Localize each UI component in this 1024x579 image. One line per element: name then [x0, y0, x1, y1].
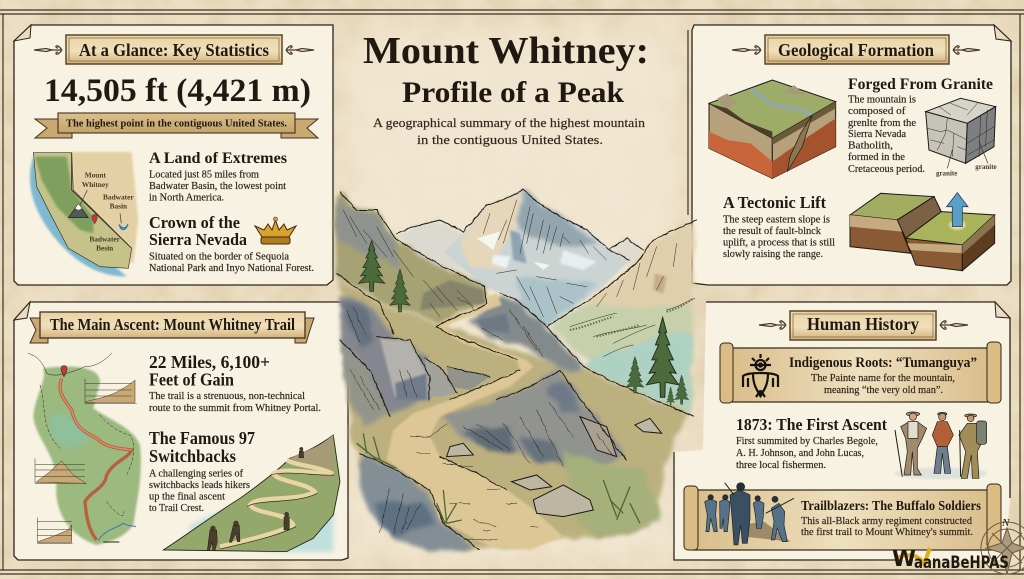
- scroll: buffalo soldiers: Trailblazers: The Buffalo Soldiers: [801, 498, 981, 513]
- heading banner: The Main Ascent: Mount Whitney Trail: [50, 315, 295, 334]
- illustration: three explorers: [894, 412, 987, 479]
- section: crown of the sierra nevada: National Park and Inyo National Forest.: [149, 263, 314, 274]
- map of California: Badwater: [103, 193, 134, 202]
- illustration: soldiers: [705, 483, 794, 545]
- compass rose: N: [1001, 517, 1010, 529]
- ribbon: The highest point in the contiguous United States.: [66, 118, 287, 130]
- foreground rock: [362, 455, 477, 552]
- subtitle: [373, 115, 646, 147]
- map of California: Besin: [96, 243, 113, 252]
- scroll: indigenous roots: [720, 342, 1001, 403]
- middle slope: [340, 277, 690, 550]
- section: 22 miles: Feet of Gain: [149, 370, 234, 390]
- title: Mount Whitney:: [363, 30, 649, 72]
- section: a tectonic lift: [723, 193, 835, 260]
- scroll: buffalo soldiers: This all-Black army regiment constructed: [801, 516, 973, 527]
- elevation chart 3: [37, 518, 73, 543]
- section: forged from granite: [848, 76, 993, 175]
- section: forged from granite: Cretaceous period.: [848, 164, 925, 175]
- section: 22 miles: 22 Miles, 6,100+: [149, 352, 270, 372]
- scroll: indigenous roots: Indigenous Roots: “Tumanguya”: [789, 355, 977, 371]
- section: the famous 97 switchbacks: up the final ascent: [149, 492, 225, 502]
- map of California: Badwater: [89, 234, 121, 243]
- compass rose: [981, 517, 1024, 574]
- panel: human history: [674, 302, 1010, 560]
- corner fold: [994, 25, 1011, 41]
- panel: geological formation: [688, 25, 1011, 285]
- panel background: [674, 302, 1010, 560]
- subtitle: A geographical summary of the highest mountain: [373, 115, 646, 130]
- heading banner: [30, 312, 314, 343]
- central ridge: [470, 297, 583, 370]
- elevation chart 1: [85, 378, 137, 403]
- icon: granite cube: granite: [936, 170, 957, 178]
- section: the famous 97 switchbacks: Switchbacks: [149, 446, 236, 466]
- section: 22 miles: [149, 352, 321, 414]
- central illustration: mountain trail: [337, 190, 697, 552]
- heading banner: [732, 35, 980, 64]
- ink outlines: [337, 190, 697, 550]
- watermark: W: [892, 547, 916, 572]
- heading banner: Geological Formation: [778, 40, 934, 60]
- section: crown of the sierra nevada: [149, 213, 314, 274]
- section: 1873 the first ascent: A. H. Johnson, and John Lucas,: [736, 448, 864, 459]
- double edge: [687, 30, 689, 215]
- section: forged from granite: Forged From Granite: [848, 76, 993, 93]
- scroll: buffalo soldiers: [684, 483, 1001, 550]
- watermark: [892, 547, 1009, 573]
- grass: [357, 433, 640, 523]
- trail map: [28, 353, 141, 545]
- heading banner: [759, 311, 968, 340]
- section: 1873 the first ascent: 1873: The First Ascent: [736, 415, 887, 434]
- hikers: [207, 447, 304, 551]
- section: forged from granite: The mountain is: [848, 95, 916, 106]
- section: the famous 97 switchbacks: The Famous 97: [149, 428, 255, 448]
- scroll: buffalo soldiers: the first trail to Mount Whitney's summit.: [801, 527, 973, 538]
- key statistic: elevation: 14,505 ft (4,421 m): [44, 73, 311, 109]
- icon: uplift arrow: [947, 193, 968, 227]
- scroll: indigenous roots: meaning “the very old man”.: [824, 385, 943, 396]
- section: crown of the sierra nevada: Situated on the border of Sequoia: [149, 252, 289, 262]
- section: forged from granite: formed in the: [848, 152, 905, 163]
- icon: crown: [255, 217, 296, 244]
- panel background: [14, 25, 333, 285]
- map of California: Basin: [110, 202, 127, 211]
- panel: the main ascent: [14, 302, 348, 560]
- switchbacks illustration: [163, 435, 340, 552]
- icon: granite cube: granite: [975, 163, 997, 171]
- section: a land of extremes: Badwater Basin, the lowest point: [149, 181, 286, 192]
- section: a tectonic lift: The steep eastern slope is: [723, 215, 830, 226]
- panel background: [692, 25, 1011, 285]
- section: forged from granite: composed of: [848, 106, 906, 117]
- section: crown of the sierra nevada: Crown of the: [149, 213, 240, 232]
- section: the famous 97 switchbacks: to Trail Crest.: [149, 503, 204, 514]
- title: [363, 30, 649, 109]
- center rock mass: [440, 370, 623, 468]
- icon: petroglyph: [743, 354, 778, 397]
- section: 22 miles: route to the summit from Whitney Portal.: [149, 403, 321, 414]
- section: 1873 the first ascent: three local fishermen.: [736, 460, 826, 471]
- section: the famous 97 switchbacks: switchbacks leads hikers: [149, 480, 250, 491]
- map of California: [30, 152, 138, 277]
- section: forged from granite: Batholith,: [848, 140, 893, 152]
- section: a land of extremes: [149, 150, 287, 204]
- section: a land of extremes: in North America.: [149, 193, 224, 204]
- subtitle: in the contiguous United States.: [417, 132, 603, 147]
- distant peaks: [397, 220, 643, 270]
- corner fold: [14, 25, 31, 41]
- section: crown of the sierra nevada: Sierra Nevada: [149, 230, 247, 249]
- section: a tectonic lift: the result of fault-blnck: [723, 226, 822, 237]
- elevation chart 2: [35, 458, 87, 483]
- left mountain: [337, 192, 487, 323]
- section: forged from granite: Sierra Nevada: [848, 129, 906, 140]
- trail: [387, 293, 563, 550]
- main peak: [443, 190, 630, 327]
- panel outline: [674, 302, 1010, 560]
- section: a land of extremes: Located just 85 miles from: [149, 170, 259, 181]
- map of California: Mount: [85, 171, 106, 180]
- corner fold: [14, 302, 30, 320]
- panel background: [14, 302, 348, 560]
- icon: granite cube: [926, 98, 997, 178]
- title: Profile of a Peak: [402, 76, 624, 109]
- section: the famous 97 switchbacks: [149, 428, 255, 514]
- heading banner: Human History: [807, 314, 919, 334]
- right ridge and valley: [550, 220, 695, 417]
- ribbon: [35, 113, 318, 138]
- map of California: Whitney: [82, 180, 109, 189]
- section: 1873 the first ascent: First summited by Charles Begole,: [736, 436, 878, 447]
- boulders: [447, 417, 662, 517]
- green foliage: [563, 453, 658, 535]
- left rocks: [338, 295, 490, 428]
- panel: at a glance key statistics: [14, 25, 333, 285]
- trees: [358, 241, 689, 405]
- corner fold: [995, 302, 1010, 318]
- section: forged from granite: grenlte from the: [848, 118, 916, 129]
- fault block diagram: [850, 193, 995, 271]
- heading banner: At a Glance: Key Statistics: [79, 40, 269, 60]
- scroll: indigenous roots: The Painte name for the mountain,: [811, 373, 955, 384]
- section: a tectonic lift: A Tectonic Lift: [723, 193, 826, 212]
- heading banner: [34, 35, 314, 64]
- section: the famous 97 switchbacks: A challenging series of: [149, 469, 243, 480]
- section: a land of extremes: A Land of Extremes: [149, 150, 287, 167]
- section: a tectonic lift: slowly raising the range.: [723, 249, 823, 260]
- section: a tectonic lift: uplift, a process that is still: [723, 238, 835, 248]
- hatching: [347, 297, 613, 540]
- block diagram: rock strata: [709, 80, 836, 178]
- section: 1873 the first ascent: [736, 415, 887, 471]
- section: 22 miles: The trail is a strenuous, non-technical: [149, 391, 305, 402]
